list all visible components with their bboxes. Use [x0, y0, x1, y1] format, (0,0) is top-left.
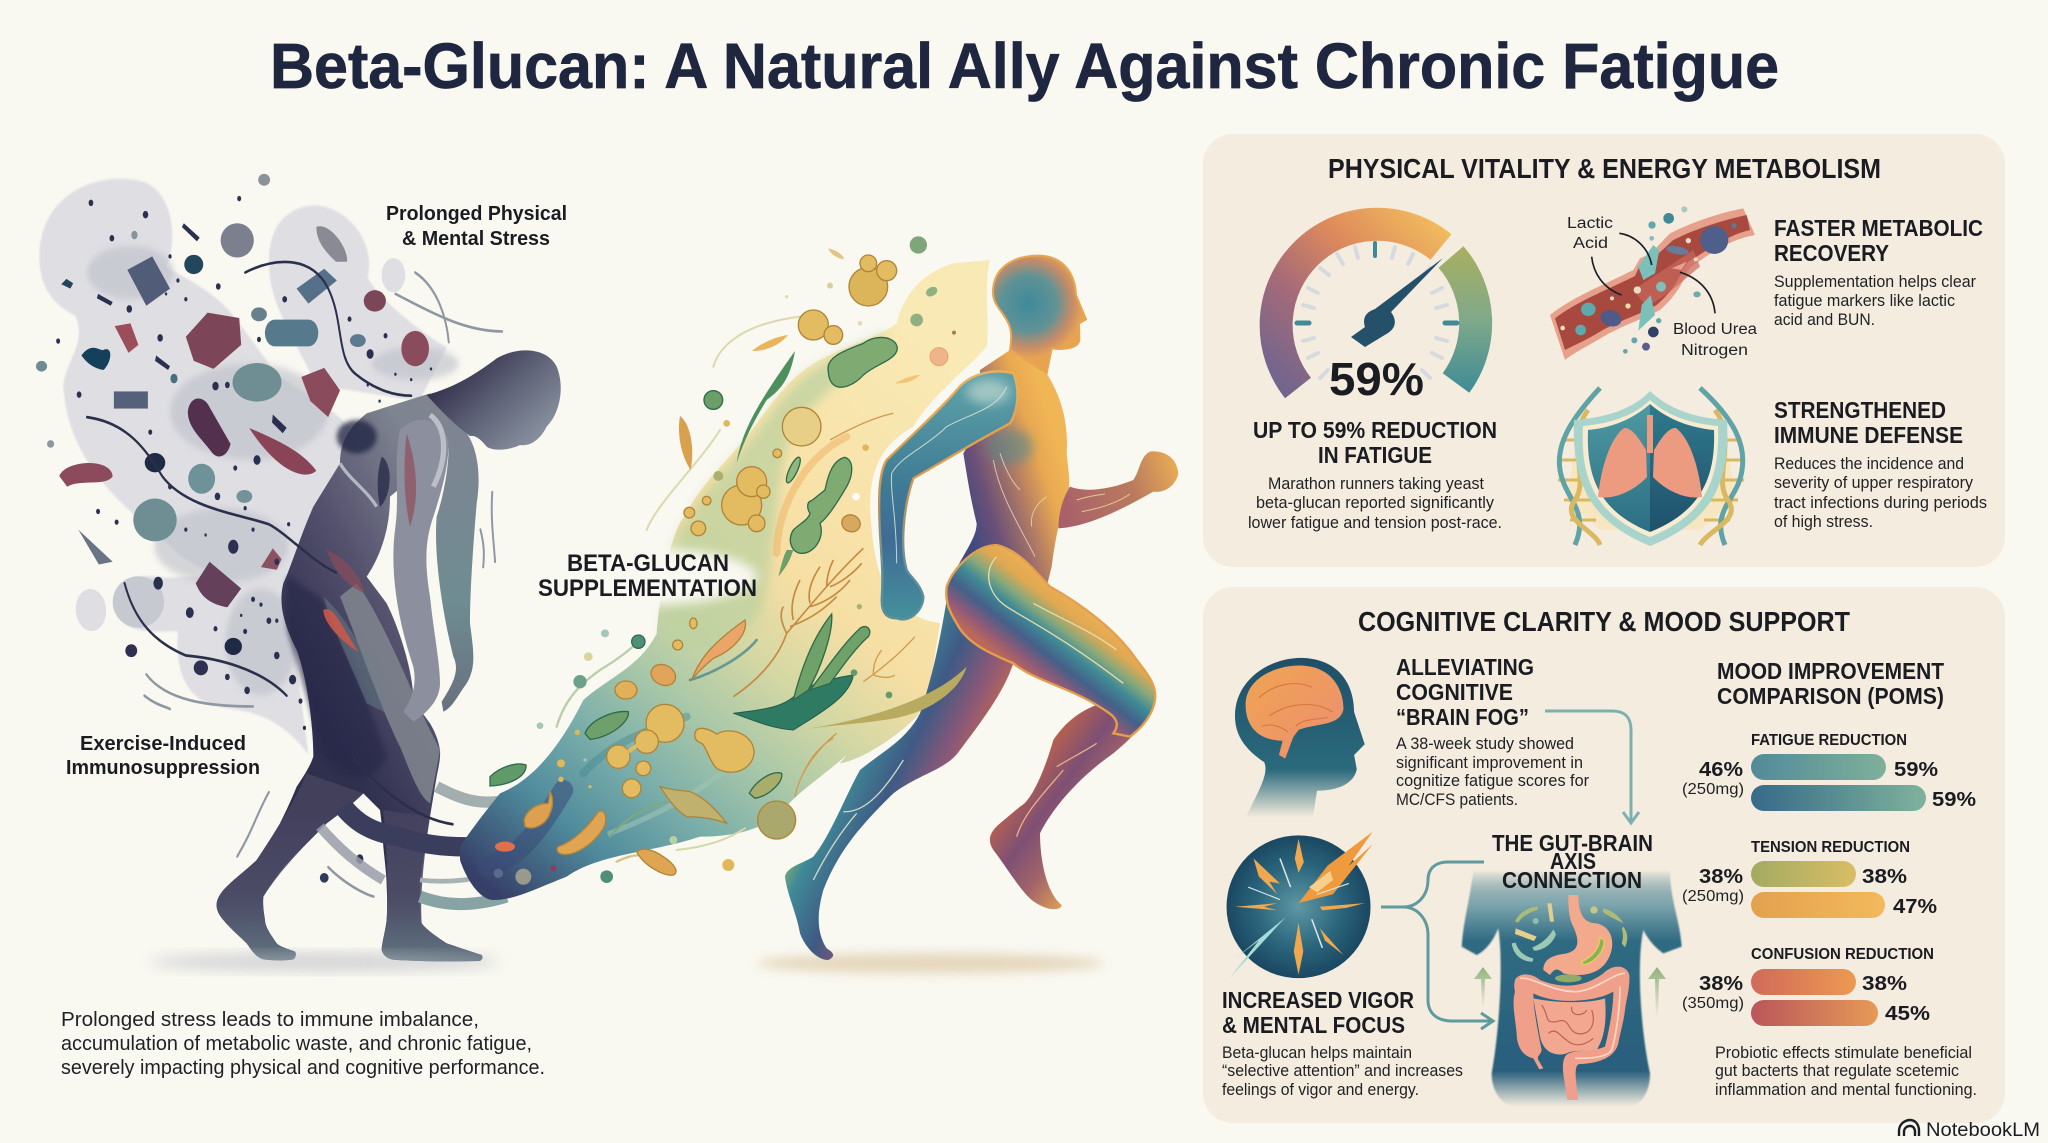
label: gut-brain axis: THE GUT-BRAIN — [1492, 830, 1653, 856]
rear leg — [785, 600, 1013, 960]
chart: fatigue reduction — [1682, 732, 1976, 811]
panel heading: PHYSICAL VITALITY & ENERGY METABOLISM — [1328, 153, 1881, 184]
head — [993, 256, 1086, 373]
dark hip mass — [287, 577, 387, 777]
darker mist — [87, 246, 459, 696]
maroon accents — [404, 433, 416, 527]
panel: physical vitality — [1203, 134, 2005, 567]
text: probiotic effects: gut bacterts that regulate scetemic — [1715, 1061, 1959, 1080]
immune defense heading: STRENGTHENED — [1774, 397, 1946, 423]
gauge — [1276, 224, 1476, 405]
text block: summary: accumulation of metabolic waste, and chronic fatigue, — [61, 1033, 532, 1055]
immune defense text — [1774, 454, 1987, 531]
arm veins — [891, 387, 1007, 563]
body silhouette — [217, 350, 561, 961]
dark shoulder mist — [337, 420, 377, 453]
torso and legs — [217, 393, 482, 961]
label: stress: & Mental Stress — [402, 228, 550, 250]
metabolic recovery text: fatigue markers like lactic — [1774, 291, 1955, 310]
thigh and hip — [946, 545, 1155, 737]
chart: confusion reduction — [1682, 946, 1934, 1026]
stat description — [1248, 474, 1502, 532]
illustration: energised runner — [757, 256, 1178, 973]
chart: tension reduction: 47% — [1893, 896, 1937, 918]
chart: fatigue reduction: (250mg) — [1682, 781, 1744, 798]
label: blood urea nitrogen: Blood Urea — [1673, 321, 1757, 338]
arrow: brain to gut — [1545, 711, 1639, 823]
chart: tension reduction: TENSION REDUCTION — [1751, 839, 1910, 856]
immune defense text: of high stress. — [1774, 512, 1873, 531]
callout lines — [1592, 233, 1715, 313]
text: vigor — [1222, 1043, 1463, 1099]
shoulder highlight — [967, 379, 1010, 404]
front lower leg — [990, 700, 1155, 909]
text: vigor: “selective attention” and increases — [1222, 1061, 1463, 1080]
stat description: lower fatigue and tension post-race. — [1248, 513, 1502, 532]
pale hip stripe — [340, 463, 377, 507]
panel: cognitive clarity — [1203, 587, 2005, 1123]
heading: vigor: INCREASED VIGOR — [1222, 987, 1414, 1013]
icon: shield with lungs — [1558, 388, 1744, 546]
heading: brain fog: COGNITIVE — [1396, 679, 1513, 705]
olive blade over rear leg — [800, 667, 967, 730]
bacteria — [1512, 903, 1627, 962]
chart: confusion reduction: 38% — [1699, 973, 1743, 995]
illustration: fatigued figure with stress debris — [36, 174, 561, 971]
text: probiotic effects: inflammation and mental functioning. — [1715, 1080, 1977, 1099]
icon: torso and gut — [1462, 870, 1682, 1107]
small dots — [494, 283, 956, 885]
panel heading: COGNITIVE CLARITY & MOOD SUPPORT — [1358, 606, 1850, 637]
text: brain fog: cognitize fatigue scores for — [1396, 771, 1589, 790]
label: supplementation: BETA-GLUCAN — [567, 550, 729, 577]
chart: tension reduction: (250mg) — [1682, 888, 1744, 905]
text: brain fog — [1396, 734, 1589, 809]
front arm — [436, 433, 479, 712]
heading: brain fog — [1396, 654, 1534, 730]
label: immunosuppression — [66, 733, 260, 779]
needle — [1351, 258, 1443, 347]
heading: vigor — [1222, 987, 1414, 1038]
chart: fatigue reduction: 59% — [1894, 759, 1938, 781]
heading: vigor: & MENTAL FOCUS — [1222, 1012, 1405, 1038]
label: immunosuppression: Exercise-Induced — [80, 733, 246, 755]
chart: tension reduction — [1682, 839, 1937, 918]
chart: fatigue reduction: FATIGUE REDUCTION — [1751, 732, 1907, 749]
chart: confusion reduction: 45% — [1885, 1003, 1930, 1025]
rear-leg veins — [813, 760, 903, 880]
stream bands across legs — [320, 787, 507, 904]
chart: confusion reduction: 38% — [1862, 973, 1907, 995]
label: gut-brain axis — [1492, 830, 1653, 893]
forearm highlight — [1077, 494, 1130, 512]
peach cell — [930, 348, 948, 366]
heading: brain fog: “BRAIN FOG” — [1396, 704, 1529, 730]
chart: fatigue reduction: 59% — [1932, 789, 1976, 811]
text: probiotic effects — [1715, 1043, 1977, 1099]
text block: summary: severely impacting physical and cognitive performance. — [61, 1057, 545, 1079]
metabolic recovery text: acid and BUN. — [1774, 310, 1875, 329]
green edge wash — [663, 330, 890, 650]
stat description: beta-glucan reported significantly — [1256, 493, 1494, 512]
algae and wheat — [679, 248, 920, 797]
DNA strands — [1558, 388, 1744, 545]
thigh veins — [989, 557, 1123, 683]
label: lactic acid — [1567, 215, 1613, 252]
immune defense heading — [1774, 397, 1963, 448]
central arm — [393, 420, 449, 722]
pale shoulder stripe — [430, 415, 444, 487]
ground shadow — [150, 953, 500, 971]
label: lactic acid: Acid — [1573, 235, 1608, 252]
illustration: beta-glucan flow — [460, 236, 990, 900]
icon: head and brain — [1235, 658, 1365, 817]
gold and green microbes — [524, 255, 897, 875]
chart: confusion reduction: CONFUSION REDUCTION — [1751, 946, 1934, 963]
label: gut-brain axis: AXIS — [1550, 848, 1596, 874]
front-leg veins — [1017, 743, 1097, 837]
chart: tension reduction: 38% — [1862, 866, 1907, 888]
metabolic recovery text — [1774, 272, 1976, 329]
label: supplementation — [538, 550, 757, 602]
torso — [950, 347, 1069, 607]
immune defense text: tract infections during periods — [1774, 493, 1987, 512]
back arm — [879, 371, 1017, 619]
stat heading: UP TO 59% REDUCTION — [1253, 417, 1497, 443]
watermark: NotebookLM: NotebookLM — [1926, 1120, 2040, 1141]
gauge value: 59% — [1329, 353, 1424, 405]
lower legs — [382, 810, 482, 961]
title: Beta-Glucan: A Natural Ally Against Chronic Fatigue — [270, 30, 1779, 102]
debris pieces — [36, 174, 432, 883]
ground shadow — [757, 953, 1103, 973]
icon: energy burst — [1227, 832, 1373, 978]
small intestine — [1533, 998, 1606, 1054]
label: immunosuppression: Immunosuppression — [66, 757, 260, 779]
lungs — [1598, 415, 1702, 498]
text: brain fog: A 38-week study showed — [1396, 734, 1574, 753]
green arrows — [1474, 967, 1666, 1018]
metabolic recovery heading: RECOVERY — [1774, 240, 1889, 266]
immune defense text: Reduces the incidence and — [1774, 454, 1964, 473]
immune defense heading: IMMUNE DEFENSE — [1774, 422, 1963, 448]
label: stress: Prolonged Physical — [386, 203, 567, 225]
text block: summary: Prolonged stress leads to immune imbalance, — [61, 1009, 479, 1031]
label: gut-brain axis: CONNECTION — [1502, 867, 1642, 893]
pale thigh — [340, 583, 440, 803]
dark tendrils — [87, 262, 453, 824]
icon: blood vessel — [1550, 206, 1757, 360]
text: brain fog: significant improvement in — [1396, 753, 1583, 772]
head — [427, 350, 561, 450]
flowing stream — [460, 260, 990, 900]
bracket arrow: energy to gut — [1381, 862, 1493, 1029]
label: blood urea nitrogen: Nitrogen — [1681, 342, 1748, 359]
stat description: Marathon runners taking yeast — [1268, 474, 1484, 493]
stream highlights — [487, 317, 847, 867]
text: brain fog: MC/CFS patients. — [1396, 790, 1518, 809]
text: vigor: Beta-glucan helps maintain — [1222, 1043, 1412, 1062]
text block: summary — [61, 1009, 545, 1079]
heading: brain fog: ALLEVIATING — [1396, 654, 1534, 680]
metabolic recovery heading: FASTER METABOLIC — [1774, 215, 1983, 241]
chart: tension reduction: 38% — [1699, 866, 1743, 888]
heading: mood comparison — [1717, 658, 1944, 709]
large intestine — [1514, 967, 1629, 1100]
soft glow behind label — [537, 548, 757, 605]
torso highlights — [993, 453, 1047, 557]
metabolic recovery text: Supplementation helps clear — [1774, 272, 1976, 291]
grey swoosh lines — [144, 272, 502, 897]
chart: confusion reduction: (350mg) — [1682, 995, 1744, 1012]
stat heading: IN FATIGUE — [1318, 442, 1432, 468]
heading: mood comparison: COMPARISON (POMS) — [1717, 683, 1944, 709]
stress clouds — [39, 179, 447, 755]
immune defense text: severity of upper respiratory — [1774, 473, 1973, 492]
chart: fatigue reduction: 46% — [1699, 759, 1743, 781]
label: supplementation: SUPPLEMENTATION — [538, 575, 757, 602]
heading: mood comparison: MOOD IMPROVEMENT — [1717, 658, 1944, 684]
label: lactic acid: Lactic — [1567, 215, 1613, 232]
text: vigor: feelings of vigor and energy. — [1222, 1080, 1419, 1099]
teal mid band — [323, 597, 387, 713]
text: probiotic effects: Probiotic effects stimulate beneficial — [1715, 1043, 1972, 1062]
stomach — [1543, 895, 1612, 975]
label: blood urea nitrogen — [1673, 321, 1757, 359]
chest shadow — [987, 428, 1033, 465]
front arm — [1058, 451, 1178, 528]
metabolic recovery heading — [1774, 215, 1983, 266]
stat heading — [1253, 417, 1497, 468]
label: stress — [386, 203, 567, 250]
